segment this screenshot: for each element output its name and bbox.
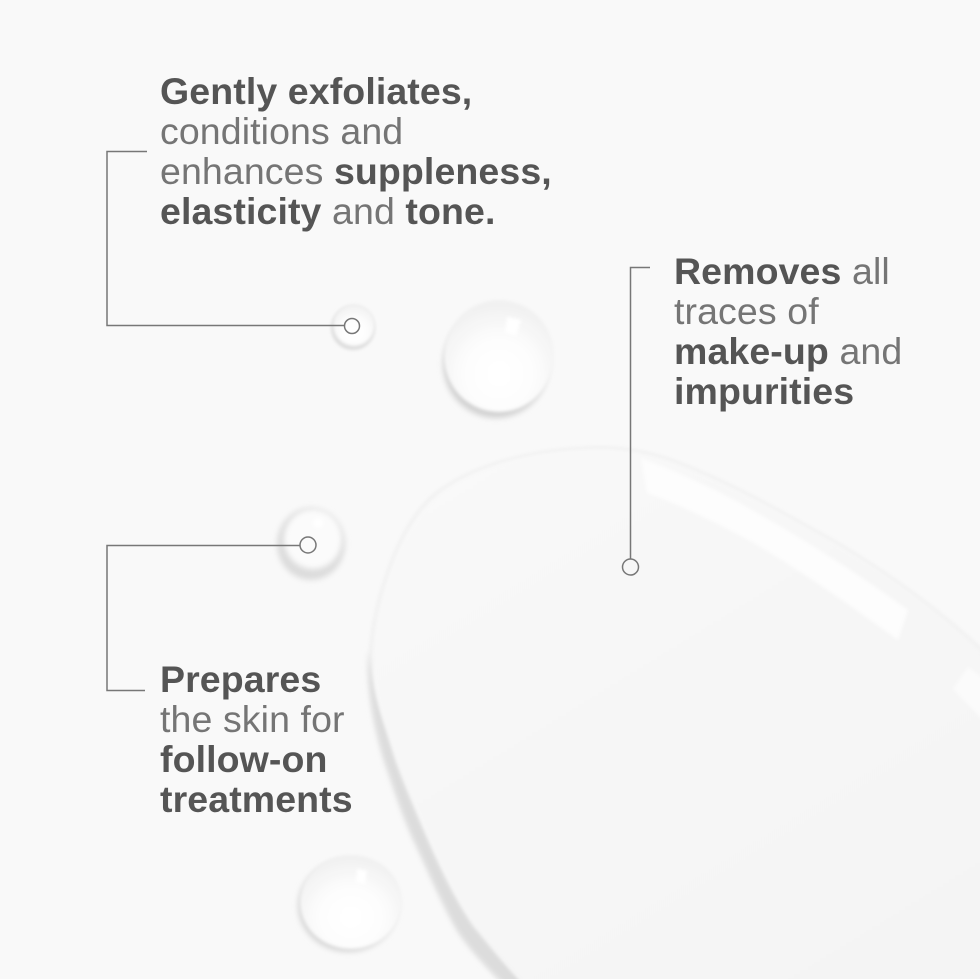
droplet: top large: [443, 300, 554, 418]
blob right highlight: [953, 667, 980, 722]
text: removes: [674, 250, 902, 412]
text: removes: make-up and: [674, 330, 902, 372]
text: gently exfoliates: elasticity and tone.: [160, 190, 496, 232]
connector: top left callout: [107, 152, 360, 334]
text: prepares: follow-on: [160, 738, 328, 780]
droplet: bottom: [298, 855, 402, 952]
text: gently exfoliates: Gently exfoliates,: [160, 70, 472, 112]
text: removes: traces of: [674, 290, 819, 332]
text: gently exfoliates: conditions and: [160, 110, 403, 152]
connector: right callout: [622, 268, 650, 575]
text: prepares: Prepares: [160, 658, 321, 700]
text: removes: Removes all: [674, 250, 890, 292]
text: gently exfoliates: [160, 70, 552, 232]
text: prepares: [160, 658, 353, 820]
text: removes: impurities: [674, 370, 854, 412]
droplet: middle: [277, 508, 345, 580]
text: gently exfoliates: enhances suppleness,: [160, 150, 552, 192]
droplet: small top: [331, 304, 375, 350]
blob shadow edge: [368, 650, 530, 979]
text: prepares: the skin for: [160, 698, 345, 740]
connector: lower left callout: [107, 537, 316, 690]
blob highlight: [641, 458, 908, 640]
text: prepares: treatments: [160, 778, 353, 820]
large serum blob: [368, 446, 980, 979]
